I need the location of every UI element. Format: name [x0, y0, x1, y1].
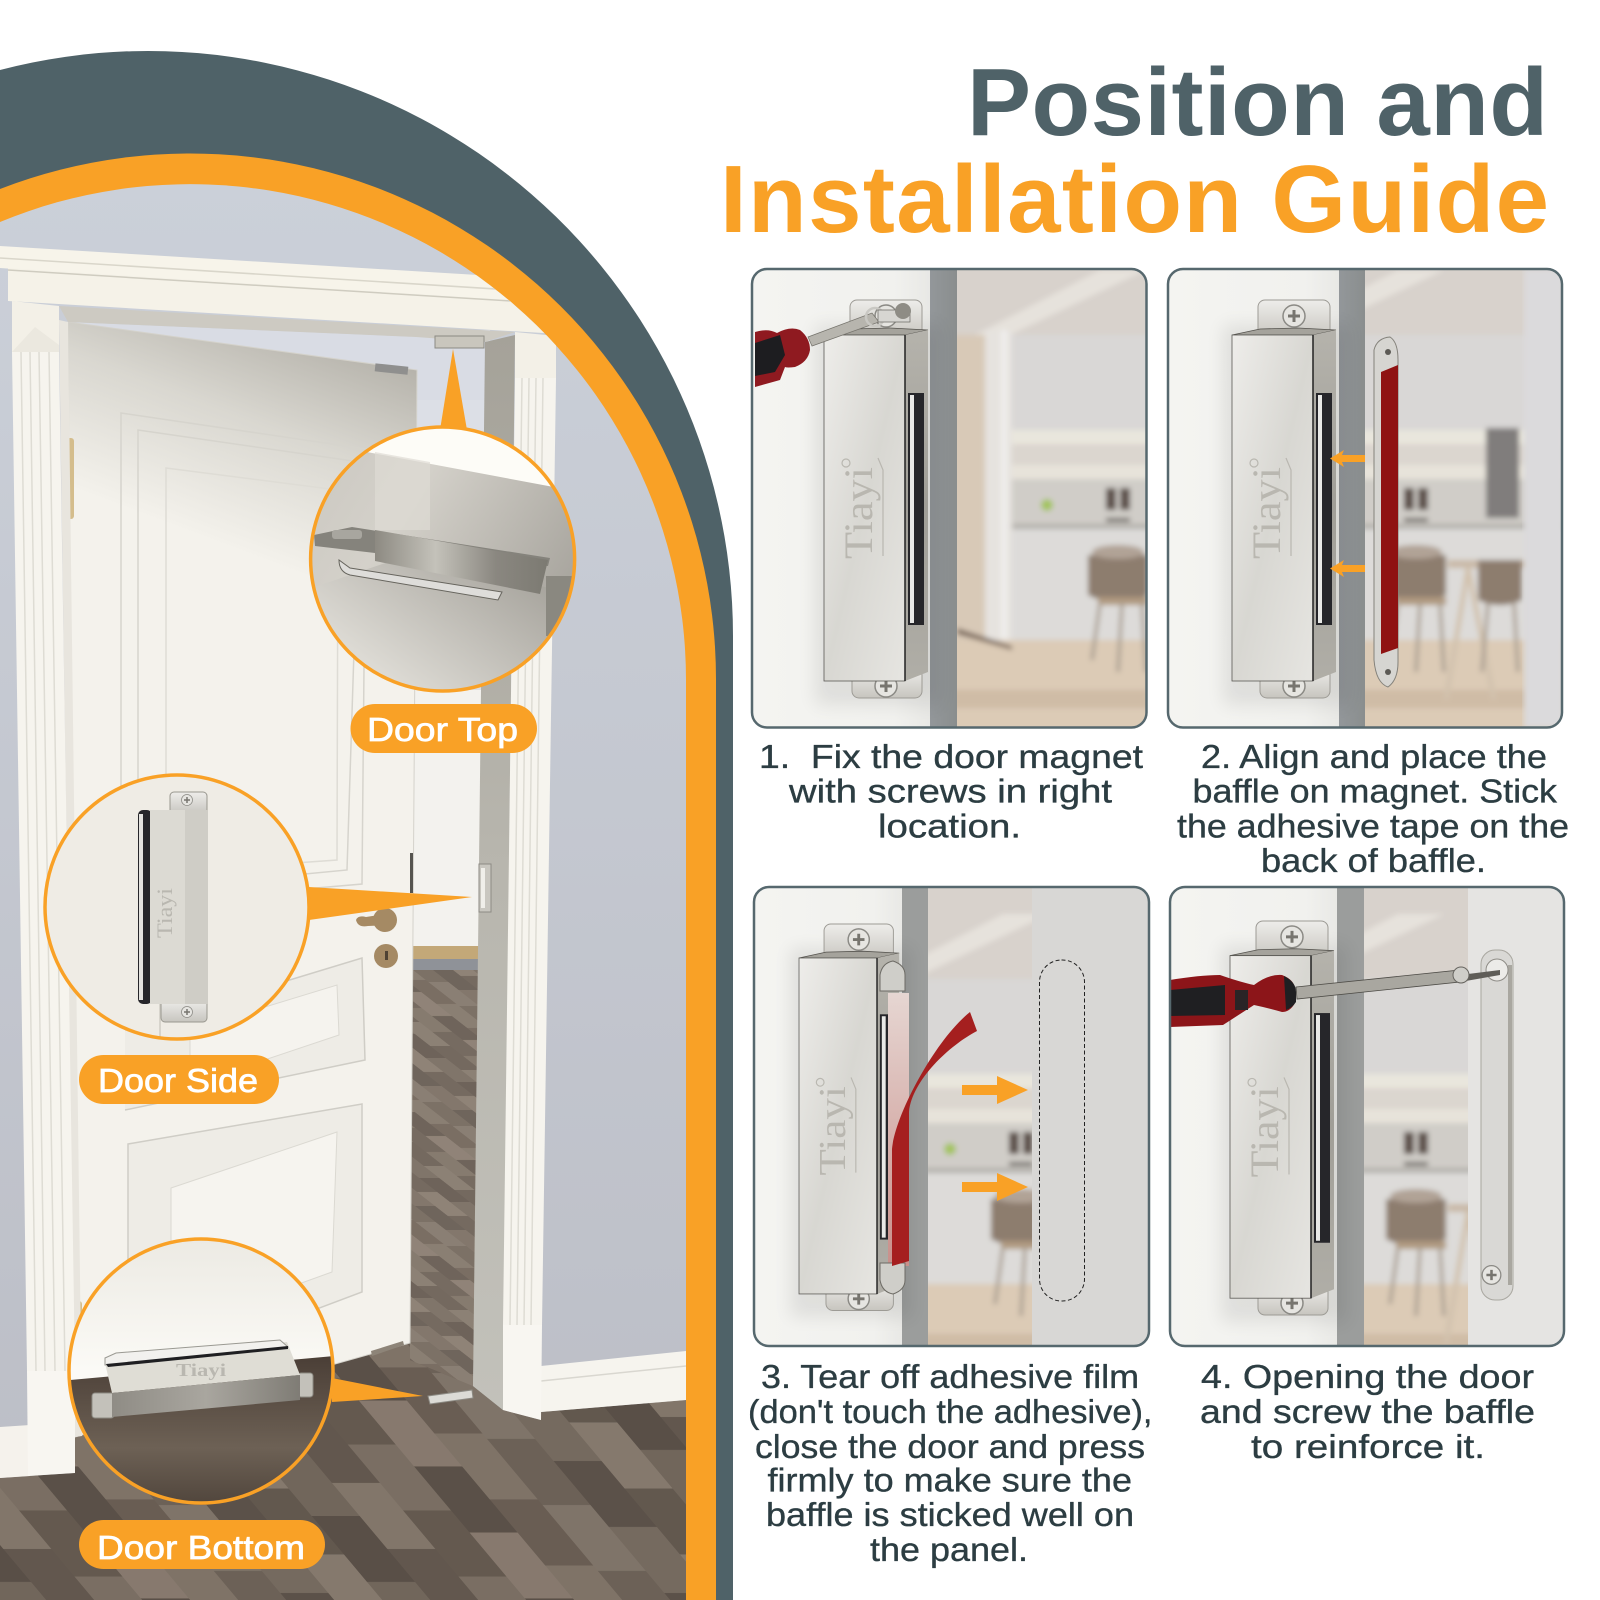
dark arch background — [0, 51, 733, 1600]
step 4 caption: to reinforce it. — [1251, 1428, 1485, 1465]
label pill: door side — [79, 1055, 279, 1104]
step 2 caption: back of baffle. — [1261, 842, 1486, 879]
door lower panel — [127, 1103, 363, 1309]
title line 1: Position and — [967, 49, 1548, 156]
zoom circle: door top — [308, 425, 576, 693]
magnet on floor — [428, 1390, 473, 1404]
step 1 caption — [759, 738, 1143, 844]
step 3 caption: firmly to make sure the — [768, 1462, 1132, 1498]
view through doorway — [410, 330, 490, 971]
label pill: door top — [350, 704, 537, 753]
label pill: door bottom — [79, 1520, 325, 1569]
pointer: door side — [309, 887, 472, 920]
callout: door top — [300, 349, 590, 753]
step 2 panel — [1166, 268, 1568, 872]
wood floor — [0, 1343, 686, 1600]
step 4 panel — [1098, 794, 1600, 1465]
callout: door bottom — [60, 1230, 423, 1569]
crown moulding — [0, 246, 560, 334]
orange arch border — [0, 153, 716, 1600]
step 3 caption: baffle is sticked well on — [766, 1496, 1134, 1533]
screwdriver — [1170, 967, 1500, 1027]
title — [720, 49, 1549, 253]
right door jamb — [473, 335, 515, 1410]
callout: door side — [40, 770, 472, 1104]
zoom circle: door side — [40, 770, 320, 1050]
label pill: door bottom: Door Bottom — [97, 1529, 305, 1566]
arrow: upper — [962, 1076, 1028, 1104]
right pilaster — [503, 332, 556, 1420]
step 3 caption: close the door and press — [755, 1428, 1145, 1465]
step 2 caption: 2. Align and place the — [1201, 738, 1547, 775]
step 3 image — [703, 794, 1223, 1444]
title line 2: Installation Guide — [720, 146, 1549, 253]
step 4 caption — [1200, 1358, 1535, 1465]
step 3 caption: (don't touch the adhesive), — [748, 1393, 1152, 1430]
zoom circle: door bottom: Tiayi — [176, 1360, 226, 1380]
step 1 image — [750, 268, 1148, 729]
arrow: lower — [962, 1173, 1028, 1201]
magnet on jamb side — [479, 864, 491, 912]
magnet at door top — [435, 336, 484, 348]
zoom circle: door side: Tiayi — [152, 888, 177, 938]
step 3 caption — [748, 1358, 1152, 1568]
left pilaster — [12, 301, 82, 1476]
step 2 caption: baffle on magnet. Stick — [1192, 772, 1558, 810]
step 1 caption: 1. Fix the door magnet — [759, 738, 1143, 775]
arrow: upper — [1330, 450, 1365, 467]
dark latch — [410, 853, 413, 893]
pointer: door bottom — [332, 1378, 423, 1402]
gap above door — [78, 322, 410, 368]
right baseboard — [541, 1351, 686, 1412]
step 1 caption: with screws in right — [788, 772, 1112, 810]
pointer: door top — [440, 349, 467, 430]
zoom circle: door bottom — [60, 1230, 345, 1510]
step 4 image — [1098, 794, 1600, 1444]
floor plate on door — [371, 1341, 404, 1356]
step 2 caption: the adhesive tape on the — [1177, 808, 1569, 844]
step 3 panel — [750, 886, 1150, 1568]
door upper panel — [121, 413, 366, 905]
left baseboard — [0, 1425, 30, 1478]
room wall — [0, 180, 690, 1600]
top plate on door — [375, 363, 408, 375]
dashed placement outline — [1040, 960, 1084, 1301]
step 2 caption — [1177, 738, 1569, 879]
step 3 caption: the panel. — [870, 1531, 1028, 1568]
step 3 caption: 3. Tear off adhesive film — [761, 1358, 1139, 1395]
lintel underside — [59, 306, 515, 342]
step 4 caption: 4. Opening the door — [1201, 1358, 1534, 1395]
baffle with red adhesive — [1374, 337, 1398, 687]
step 1 caption: location. — [878, 808, 1021, 844]
door middle panel — [125, 958, 365, 1110]
hinges — [70, 438, 82, 1313]
step 1 panel — [750, 268, 1148, 838]
arrow: lower — [1330, 560, 1365, 577]
door scene illustration — [0, 180, 690, 1600]
door leaf — [68, 322, 417, 1437]
label pill: door side: Door Side — [98, 1062, 258, 1099]
baffle plate — [1481, 950, 1513, 1300]
far floor through doorway — [410, 970, 482, 1386]
door handle and lock — [356, 908, 398, 968]
label pill: door top: Door Top — [367, 711, 518, 748]
step 2 image — [1166, 268, 1564, 729]
screwdriver — [755, 303, 911, 387]
baffle with film — [880, 961, 977, 1294]
step 4 caption: and screw the baffle — [1200, 1393, 1535, 1430]
